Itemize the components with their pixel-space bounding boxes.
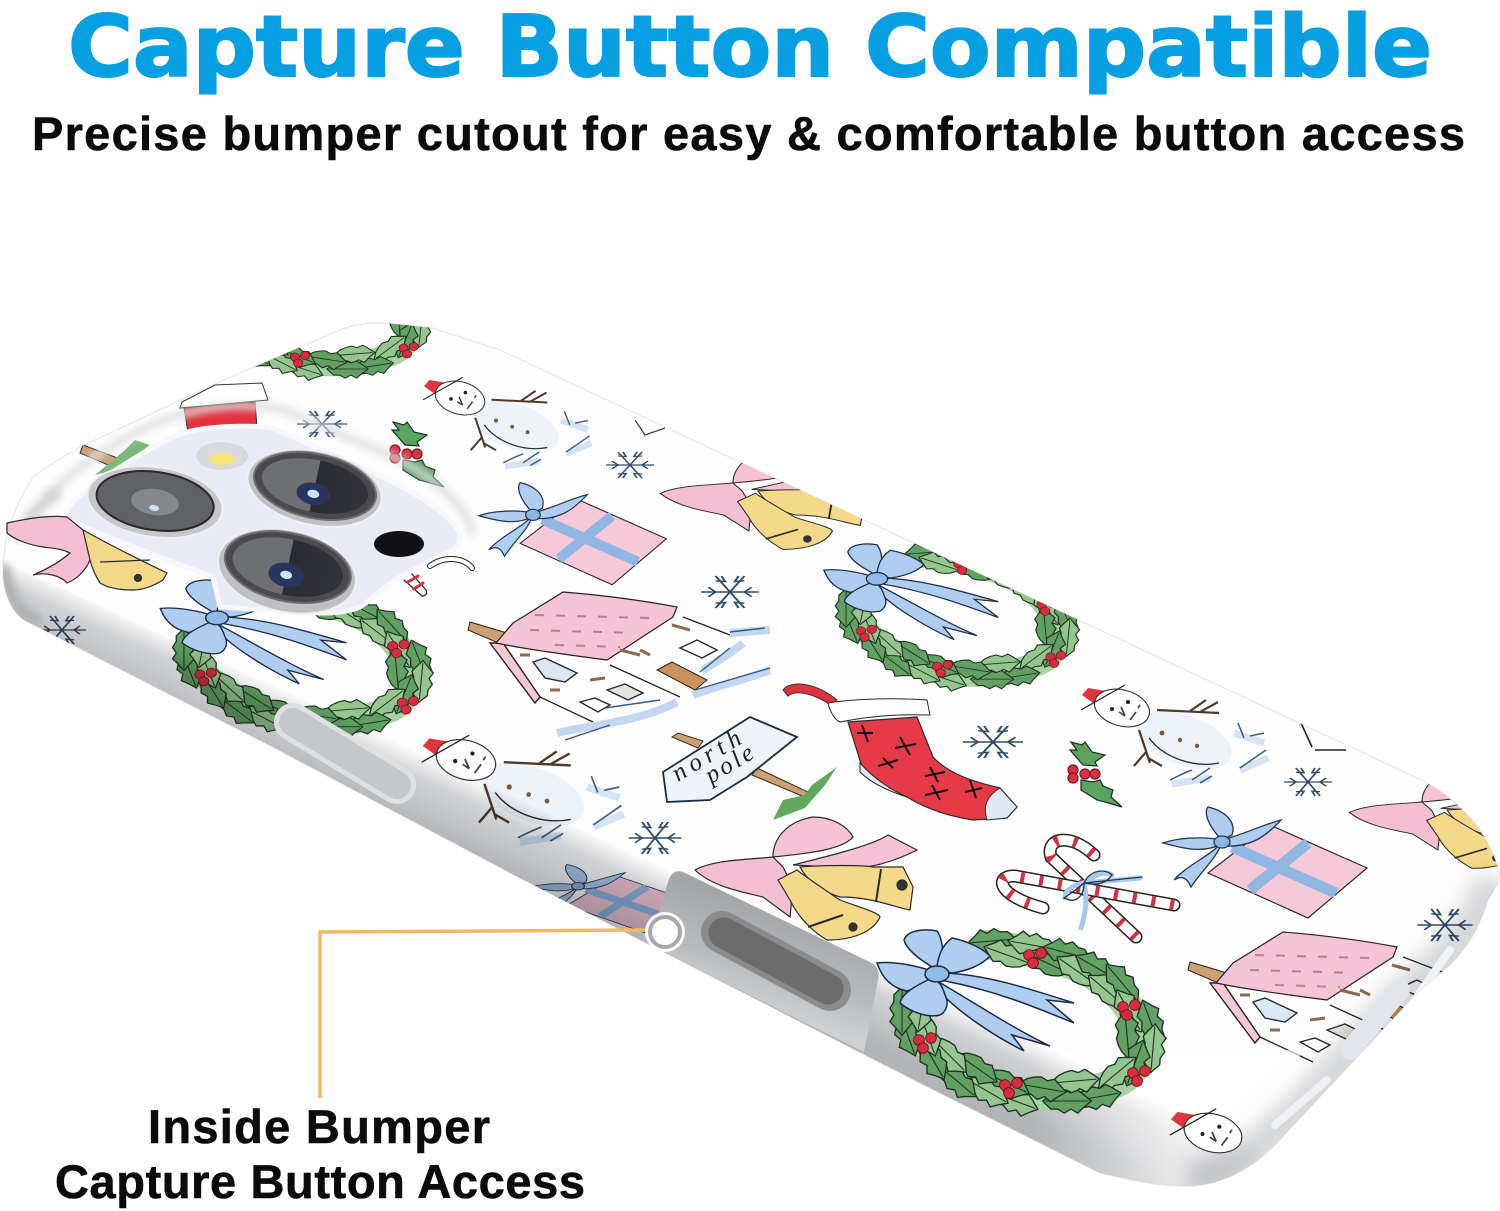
holly [390, 422, 1122, 807]
wreath upper right [824, 541, 1084, 695]
camera plateau [67, 426, 460, 613]
bells middle [695, 817, 917, 940]
small sign piece right [1301, 723, 1346, 750]
north pole sign: north [667, 725, 746, 787]
callout label: Inside Bumper [148, 1100, 490, 1153]
wreath lower [877, 927, 1171, 1121]
bell left [7, 516, 167, 590]
lens two [240, 438, 389, 538]
gingerbread house upper [468, 592, 770, 740]
stocking [783, 684, 1017, 820]
snowman one [423, 376, 591, 466]
callout label [55, 1100, 585, 1208]
right side button recesses [1275, 950, 1450, 1125]
post and grass partial [80, 440, 150, 475]
festive pattern [3, 323, 1500, 1186]
stocking partial [179, 382, 269, 430]
flash [196, 442, 248, 470]
callout label: Capture Button Access [55, 1155, 585, 1208]
subtitle: Precise bumper cutout for easy & comfortable button access [32, 107, 1465, 160]
wreath top [254, 323, 432, 381]
right edge shading [1190, 880, 1495, 1180]
title: Capture Button Compatible [68, 0, 1432, 97]
callout marker [645, 912, 685, 952]
north pole sign [663, 717, 837, 820]
gift upper [479, 483, 666, 585]
lens three [210, 516, 364, 626]
candy canes [1002, 840, 1174, 937]
gift right [1163, 807, 1367, 918]
side shading fade right [1055, 1050, 1300, 1186]
wreath middle left [160, 577, 438, 744]
camera lip [45, 406, 472, 535]
snowman four head [1170, 1108, 1242, 1154]
capture button cutout block [650, 871, 879, 1052]
small sign piece top [635, 420, 665, 435]
camera corner shading [18, 490, 60, 540]
side shading [0, 551, 1300, 1211]
callout leader line [320, 930, 650, 1098]
small candy canes on plate [404, 559, 472, 596]
snowman two [1081, 683, 1268, 784]
side button [293, 722, 397, 785]
gingerbread house lower [1188, 932, 1450, 1062]
gift on side [534, 864, 665, 934]
phone case [2, 322, 1500, 1187]
bells right [1348, 784, 1498, 869]
lens one [83, 458, 227, 546]
north pole sign: pole [698, 739, 759, 790]
snowflakes [38, 411, 1473, 941]
left side edge tint [3, 565, 40, 622]
case body [3, 323, 1500, 1186]
snowman three [422, 733, 624, 842]
lidar sensor [374, 531, 424, 557]
bells upper [660, 462, 862, 550]
